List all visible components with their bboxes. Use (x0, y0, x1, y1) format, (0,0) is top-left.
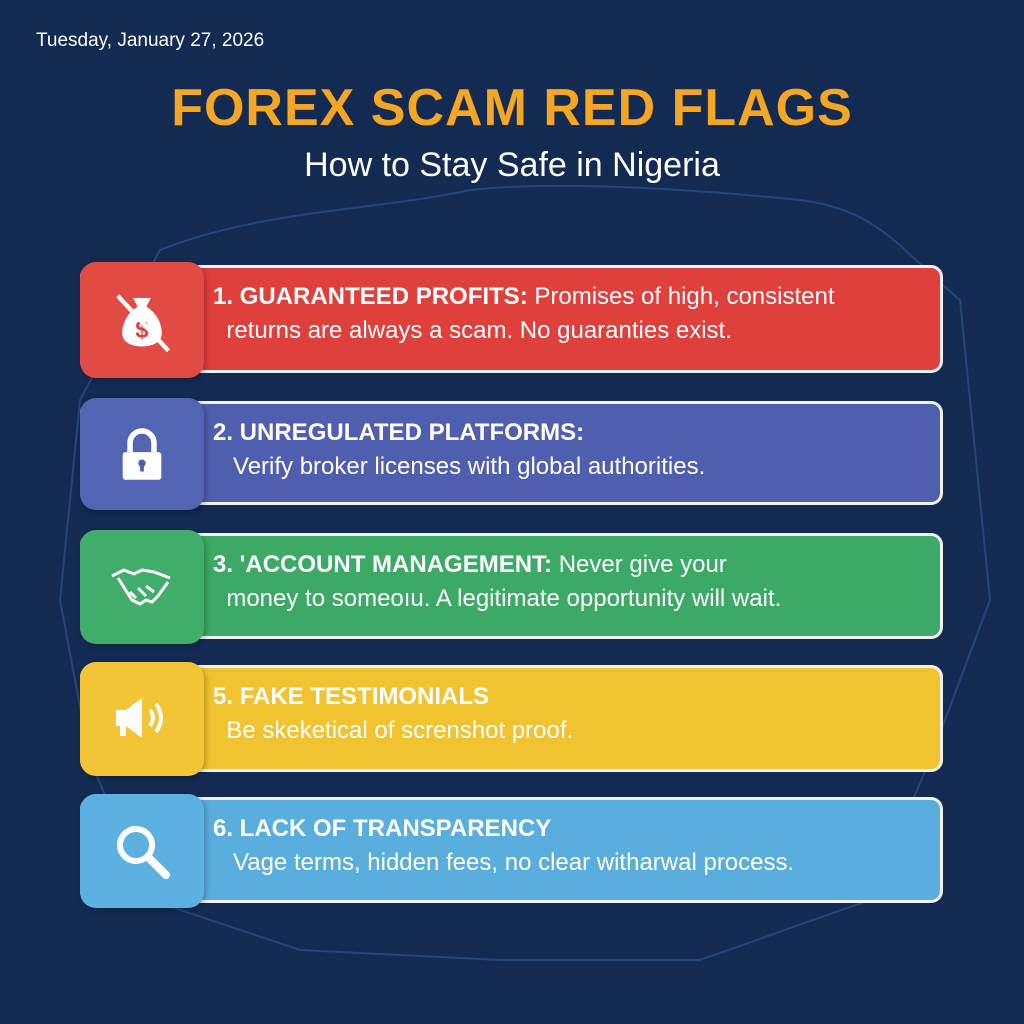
panel: lack of transparency (80, 797, 943, 903)
panel: unregulated platforms (80, 401, 943, 505)
icon: lock (80, 398, 204, 510)
icon: money bag (80, 262, 204, 378)
date: Tuesday, January 27, 2026 (36, 30, 264, 51)
text: 2. UNREGULATED PLATFORMS: (213, 419, 584, 446)
subtitle: How to Stay Safe in Nigeria (304, 146, 720, 184)
text: Vage terms, hidden fees, no clear witharwal process. (233, 849, 794, 876)
icon: magnifier (80, 794, 204, 908)
panel: guaranteed profits (80, 265, 943, 373)
icon: handshake (80, 530, 204, 644)
text: 3. 'ACCOUNT MANAGEMENT: Never give your (213, 551, 727, 578)
panel: fake testimonials (80, 665, 943, 772)
text (213, 683, 573, 744)
text: Be skeketical of screnshot proof. (226, 717, 573, 744)
text: returns are always a scam. No guaranties exist. (226, 317, 732, 344)
text (213, 283, 834, 344)
text: Verify broker licenses with global authorities. (233, 453, 705, 480)
icon: megaphone (80, 662, 204, 776)
text: 6. LACK OF TRANSPARENCY (213, 815, 551, 842)
text: money to someoıu. A legitimate opportunity will wait. (226, 585, 781, 612)
title: FOREX SCAM RED FLAGS (171, 79, 853, 137)
text (213, 419, 705, 480)
text (213, 815, 794, 876)
text: 1. GUARANTEED PROFITS: Promises of high, consistent (213, 283, 834, 310)
icon: money bag: $ (135, 317, 149, 344)
text (213, 551, 781, 612)
text: 5. FAKE TESTIMONIALS (213, 683, 489, 710)
panel: account management (80, 533, 943, 639)
